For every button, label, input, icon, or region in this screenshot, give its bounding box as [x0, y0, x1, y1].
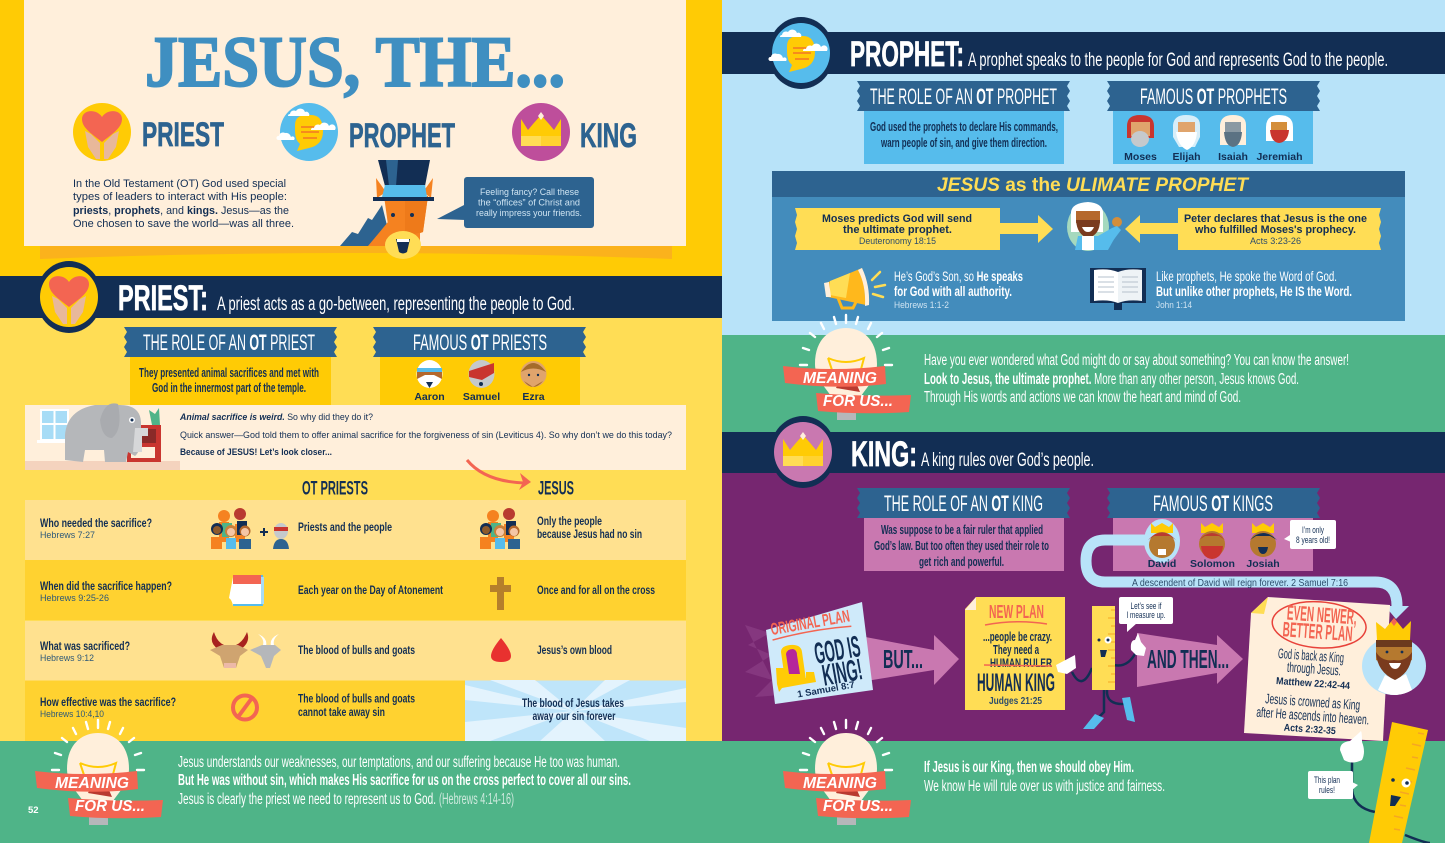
arrow: but: BUT... — [883, 644, 923, 674]
callout: only 8 years old: 8 years old! — [1296, 535, 1330, 546]
panel: role of a prophet: THE ROLE OF AN OT PROPHET — [870, 84, 1057, 109]
kings portraits — [1144, 519, 1336, 570]
row: when did the sacrifice happen — [25, 560, 686, 620]
page background: right light blue — [722, 0, 1445, 335]
text: meaning prophet — [924, 352, 1349, 406]
icon: donkey in top hat — [340, 160, 434, 259]
row: what was sacrificed: Hebrews 9:12 — [40, 653, 94, 664]
column heading: Jesus: JESUS — [538, 478, 574, 500]
intro paragraph — [73, 178, 294, 230]
label: priest: PRIEST — [142, 116, 224, 154]
section banner: priest — [0, 261, 722, 333]
card: new plan: HUMAN RULER — [990, 658, 1052, 670]
arrow: to Jesus column — [467, 460, 531, 490]
text: meaning priest: But He was without sin, which makes His sacrifice for us on the cross perfect to cover all our sins. — [178, 772, 631, 789]
intro paragraph: types of leaders to interact with His people: — [73, 191, 287, 203]
icon: Josiah — [1250, 523, 1277, 557]
intro paragraph: priests, prophets, and kings. Jesus—as the — [73, 205, 289, 217]
callout: measure up — [1119, 597, 1173, 632]
name: Josiah: Josiah — [1246, 558, 1280, 570]
panel: role of a king — [857, 488, 1070, 571]
panel: role of a king: THE ROLE OF AN OT KING — [884, 491, 1043, 516]
table: priests vs Jesus — [25, 500, 686, 742]
panel: role of a prophet — [857, 81, 1070, 164]
text: meaning priest — [178, 754, 631, 808]
callout: measure up: Let’s see if — [1130, 601, 1162, 612]
arrow banner: Moses predicts: the ultimate prophet. — [843, 224, 952, 236]
illustration: elephant in the room — [37, 403, 161, 462]
panel: role of a priest: God in the innermost part of the temple. — [152, 381, 306, 395]
icon: prophet — [276, 103, 338, 161]
row: when did the sacrifice happen: When did the sacrifice happen? — [40, 581, 172, 593]
name: Aaron: Aaron — [414, 391, 445, 403]
panel: Jesus starburst: away our sin forever — [532, 711, 616, 723]
row: how effective: cannot take away sin — [298, 707, 385, 719]
icon: Ezra — [520, 361, 546, 387]
text: he speaks: Hebrews 1:1-2 — [894, 300, 949, 311]
callout: feeling fancy: the “offices” of Christ and — [478, 198, 580, 208]
arrow: but — [860, 635, 959, 685]
card: new plan: NEW PLAN — [989, 602, 1044, 622]
heading: king: KING: — [851, 435, 917, 474]
text: meaning priest: (Hebrews 4:14-16) — [439, 791, 514, 808]
arrow: and then — [1137, 633, 1243, 687]
text: meaning prophet: Look to Jesus, the ultimate prophet. More than any other person, Jesus knows God. — [924, 371, 1299, 388]
icon: Elijah — [1173, 115, 1200, 150]
text: meaning king: We know He will rule over us with justice and fairness. — [924, 778, 1165, 795]
panel: role of a priest: They presented animal sacrifices and met with — [139, 366, 319, 380]
icon: Solomon — [1199, 523, 1225, 559]
arrow banner: Moses predicts: Deuteronomy 18:15 — [859, 236, 936, 247]
icon: Jesus prophet — [1067, 202, 1122, 251]
panel: famous prophets — [1107, 81, 1320, 164]
page number: 52 — [28, 805, 39, 816]
panel: role of a king: Was suppose to be a fair ruler that applied — [881, 523, 1043, 537]
panel: Jesus starburst: The blood of Jesus takes — [522, 698, 624, 710]
row: how effective — [25, 680, 686, 742]
panel: animal sacrifice note — [25, 403, 686, 470]
callout: this plan rules: rules! — [1319, 785, 1335, 796]
panel: famous kings — [1107, 488, 1320, 571]
card: even newer plan: Jesus is crowned as King — [1265, 690, 1361, 713]
badge: meaning for us — [783, 720, 911, 825]
icon: people plus priest — [211, 508, 289, 549]
text: meaning king: If Jesus is our King, then we should obey Him. — [924, 759, 1134, 776]
badge: meaning for us: FOR US... — [75, 798, 145, 815]
icon: megaphone — [824, 268, 885, 308]
row: when did the sacrifice happen: Each year on the Day of Atonement — [298, 585, 443, 597]
icon: blood drop — [491, 638, 511, 662]
arrow banner: Peter declares: who fulfilled Moses's prophecy. — [1194, 224, 1356, 236]
icon: calendar — [229, 575, 264, 606]
arrow: descendant of David pipe — [1086, 540, 1409, 619]
icon: Jesus crowned king — [1362, 618, 1426, 695]
character: walking ruler — [1056, 597, 1173, 729]
badge: meaning for us: MEANING — [55, 775, 129, 792]
callout: feeling fancy: Feeling fancy? Call these — [480, 187, 579, 197]
row: when did the sacrifice happen: Once and for all on the cross — [537, 585, 655, 597]
callout: only 8 years old — [1284, 520, 1336, 549]
row: what was sacrificed — [25, 621, 686, 680]
text: he is the word: But unlike other prophets, He IS the Word. — [1156, 283, 1352, 299]
text: why sacrifice: Quick answer—God told them to offer animal sacrifice for the forgiveness of sin (Leviticus 4). So why don’t we do this today? — [180, 430, 672, 440]
icon: David — [1144, 519, 1180, 563]
section banner: king — [722, 416, 1445, 488]
character: thumbs-up ruler — [1308, 722, 1430, 843]
card: original plan: 1 Samuel 8:7 — [797, 680, 856, 701]
text: meaning priest: Jesus understands our weaknesses, our temptations, and our suffering because He too was human. — [178, 754, 620, 771]
text: why sacrifice — [179, 412, 672, 457]
callout: feeling fancy — [437, 177, 594, 228]
card: even newer plan: Acts 2:32-35 — [1283, 723, 1336, 737]
icon: bull and goat — [210, 632, 281, 668]
icon: priest badge — [36, 261, 102, 333]
intro paragraph: One chosen to save the world—was all three. — [73, 218, 294, 230]
icon: people — [480, 508, 520, 549]
row: how effective: The blood of bulls and goats — [298, 694, 415, 706]
text: meaning prophet: Through His words and actions we can know the heart and mind of God. — [924, 389, 1241, 406]
panel: Jesus as the ultimate prophet — [772, 171, 1405, 321]
row: who needed the sacrifice: Who needed the sacrifice? — [40, 518, 152, 530]
row: how effective: How effective was the sacrifice? — [40, 697, 176, 709]
row: when did the sacrifice happen: Hebrews 9:25-26 — [40, 593, 109, 604]
arrow banner: Peter declares: Acts 3:23-26 — [1250, 236, 1301, 247]
card: original plan: ORIGINAL PLAN — [769, 606, 851, 639]
icon: king — [512, 103, 570, 161]
text: meaning king — [924, 759, 1165, 795]
row: how effective: Hebrews 10:4,10 — [40, 709, 104, 720]
row: who needed the sacrifice: Hebrews 7:27 — [40, 530, 95, 541]
row: what was sacrificed: Jesus’s own blood — [537, 645, 612, 657]
icon: Jeremiah — [1266, 115, 1293, 143]
label: prophet: PROPHET — [349, 117, 455, 155]
badge: meaning for us: MEANING — [803, 370, 877, 387]
card: even newer plan: EVEN NEWER, — [1286, 602, 1358, 629]
arrow banner: Moses predicts: Moses predicts God will send — [822, 213, 972, 225]
callout: this plan rules: This plan — [1314, 775, 1340, 786]
panel: king background — [722, 473, 1445, 741]
callout: measure up: I measure up. — [1126, 610, 1166, 621]
arrow banner: Peter declares: Peter declares that Jesus is the one — [1184, 213, 1367, 225]
arrow: and then: AND THEN... — [1147, 644, 1229, 674]
badge: meaning for us: MEANING — [803, 775, 877, 792]
badge: meaning for us: FOR US... — [823, 798, 893, 815]
panel: famous prophets: FAMOUS OT PROPHETS — [1140, 84, 1287, 109]
panel: role of a prophet: warn people of sin, and give them direction. — [880, 136, 1047, 150]
intro paragraph: In the Old Testament (OT) God used special — [73, 178, 286, 190]
text: he speaks: for God with all authority. — [894, 283, 1012, 299]
card: even newer plan: through Jesus. — [1287, 659, 1342, 678]
panel: role of a prophet: God used the prophets to declare His commands, — [870, 120, 1058, 134]
panel: role of a priest: THE ROLE OF AN OT PRIEST — [143, 330, 315, 355]
icon: Samuel — [468, 360, 494, 388]
icon: cross — [490, 577, 511, 610]
panel: famous kings: FAMOUS OT KINGS — [1153, 491, 1273, 516]
heading: prophet: PROPHET: — [850, 35, 964, 74]
panel: meaning for us, prophet — [722, 315, 1445, 432]
section banner: prophet — [722, 17, 1445, 89]
row: who needed the sacrifice: Priests and the people — [298, 522, 392, 534]
arrow: descendant of David pipe: A descendent of David will reign forever. 2 Samuel 7:16 — [1132, 578, 1348, 589]
card: original plan: GOD IS — [812, 630, 863, 671]
name: Moses: Moses — [1124, 151, 1157, 163]
card: even newer plan: God is back as King — [1278, 645, 1344, 666]
label: king: KING — [580, 117, 637, 155]
card: even newer plan — [1244, 597, 1390, 741]
callout: this plan rules — [1308, 771, 1358, 799]
definition: king: A king rules over God’s people. — [921, 450, 1094, 471]
name: Isaiah: Isaiah — [1218, 151, 1248, 163]
callout: feeling fancy: really impress your friends. — [476, 208, 582, 218]
text: he is the word: John 1:14 — [1156, 300, 1192, 311]
card: even newer plan: Matthew 22:42-44 — [1276, 676, 1351, 692]
row: who needed the sacrifice: Only the people — [537, 516, 602, 528]
panel: famous priests: FAMOUS OT PRIESTS — [413, 330, 547, 355]
panel: famous priests — [373, 327, 586, 405]
panel: intro — [0, 0, 722, 276]
heading: priest: PRIEST: — [118, 279, 208, 318]
panel: role of a king: God’s law. But too often they used their role to — [874, 539, 1049, 553]
card: even newer plan: after He ascends into heaven. — [1256, 704, 1370, 728]
icon: Aaron — [416, 360, 442, 388]
panel: meaning for us, priest — [0, 720, 722, 843]
panel: role of a king: get rich and powerful. — [919, 555, 1004, 569]
text: why sacrifice: Because of JESUS! Let’s look closer... — [180, 447, 332, 457]
text: he speaks: He’s God’s Son, so He speaks — [894, 268, 1023, 284]
icon: no symbol — [233, 696, 257, 720]
panel: Jesus starburst — [465, 680, 686, 742]
card: new plan: They need a — [993, 643, 1040, 657]
text: meaning priest: Jesus is clearly the priest we need to represent us to God. — [178, 791, 436, 808]
card: new plan: ...people be crazy. — [983, 630, 1052, 644]
text: he is the word: Like prophets, He spoke the Word of God. — [1156, 268, 1337, 284]
card: original plan: KING! — [820, 653, 865, 693]
name: Solomon: Solomon — [1190, 558, 1235, 570]
card: original plan — [745, 602, 873, 704]
definition: priest: A priest acts as a go-between, representing the people to God. — [217, 294, 575, 315]
badge: meaning for us: FOR US... — [823, 393, 893, 410]
row: what was sacrificed: The blood of bulls and goats — [298, 645, 415, 657]
card: new plan: Judges 21:25 — [989, 696, 1042, 707]
icon: prophet badge — [768, 17, 834, 89]
badge: meaning for us — [783, 315, 911, 420]
name: Ezra: Ezra — [522, 391, 545, 403]
heading: ultimate prophet: JESUS as the ULIMATE PROPHET — [937, 175, 1249, 196]
text: why sacrifice: Animal sacrifice is weird. So why did they do it? — [179, 412, 373, 422]
card: even newer plan: BETTER PLAN — [1282, 618, 1353, 646]
name: David: David — [1148, 558, 1176, 570]
name: Jeremiah: Jeremiah — [1256, 151, 1303, 163]
arrow banner: Moses predicts — [795, 208, 1053, 250]
icon: priest — [73, 103, 131, 161]
icon: throne — [776, 645, 816, 692]
row: who needed the sacrifice — [25, 500, 686, 560]
arrow banner: Peter declares — [1125, 208, 1381, 250]
icon: king badge — [770, 416, 836, 488]
row: who needed the sacrifice: because Jesus had no sin — [537, 529, 642, 541]
row: what was sacrificed: What was sacrificed? — [40, 641, 130, 653]
icon: Moses — [1127, 115, 1154, 147]
title: JESUS, THE... — [145, 22, 565, 102]
card: new plan — [965, 597, 1065, 710]
badge: meaning for us — [35, 720, 163, 825]
text: he speaks — [894, 268, 1023, 311]
card: new plan: HUMAN KING — [977, 669, 1055, 697]
column heading: OT priests: OT PRIESTS — [302, 478, 368, 500]
icon: Isaiah — [1220, 115, 1246, 147]
panel: meaning for us, king — [722, 720, 1445, 843]
callout: only 8 years old: I’m only — [1302, 525, 1324, 536]
icon: open book — [1090, 268, 1146, 310]
text: he is the word — [1156, 268, 1352, 311]
page background: left yellow — [0, 0, 722, 843]
panel: role of a priest — [124, 327, 337, 405]
name: Elijah: Elijah — [1172, 151, 1201, 163]
name: Samuel: Samuel — [463, 391, 500, 403]
